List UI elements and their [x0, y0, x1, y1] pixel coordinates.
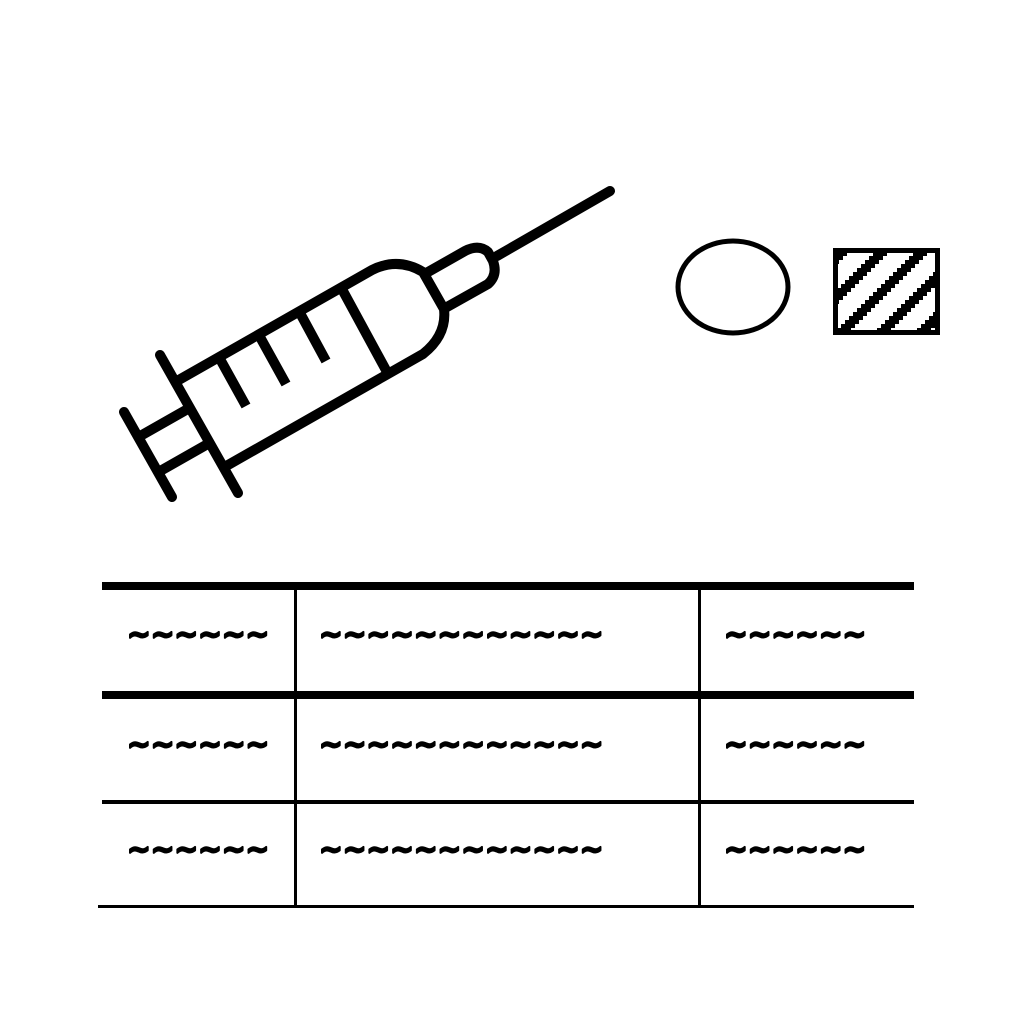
syringe hub [428, 248, 495, 307]
table row 3: ~~~~~~ [127, 833, 269, 866]
table row 1: ~~~~~~ [127, 618, 269, 651]
table row 2: ~~~~~~ [724, 728, 866, 761]
syringe barrel [177, 264, 444, 465]
syringe graduation marks [220, 313, 326, 406]
icon: syringe [124, 191, 610, 497]
syringe flange [160, 355, 238, 493]
table row 2 [127, 728, 866, 761]
table row 1: ~~~~~~ [724, 618, 866, 651]
table row 3: ~~~~~~~~~~~~ [319, 833, 604, 866]
table [98, 582, 914, 908]
table rules [98, 582, 914, 908]
icon: hatched rectangle [836, 250, 938, 332]
syringe barrel inner line [343, 291, 387, 372]
syringe plunger rods [142, 410, 206, 470]
table row 1 [127, 618, 866, 651]
table row 3: ~~~~~~ [724, 833, 866, 866]
table row 2: ~~~~~~ [127, 728, 269, 761]
syringe plunger plate [124, 412, 172, 497]
table row 2: ~~~~~~~~~~~~ [319, 728, 604, 761]
syringe needle [497, 191, 610, 256]
table row 1: ~~~~~~~~~~~~ [319, 618, 604, 651]
table row 3 [127, 833, 866, 866]
icon: empty ellipse [678, 241, 788, 333]
